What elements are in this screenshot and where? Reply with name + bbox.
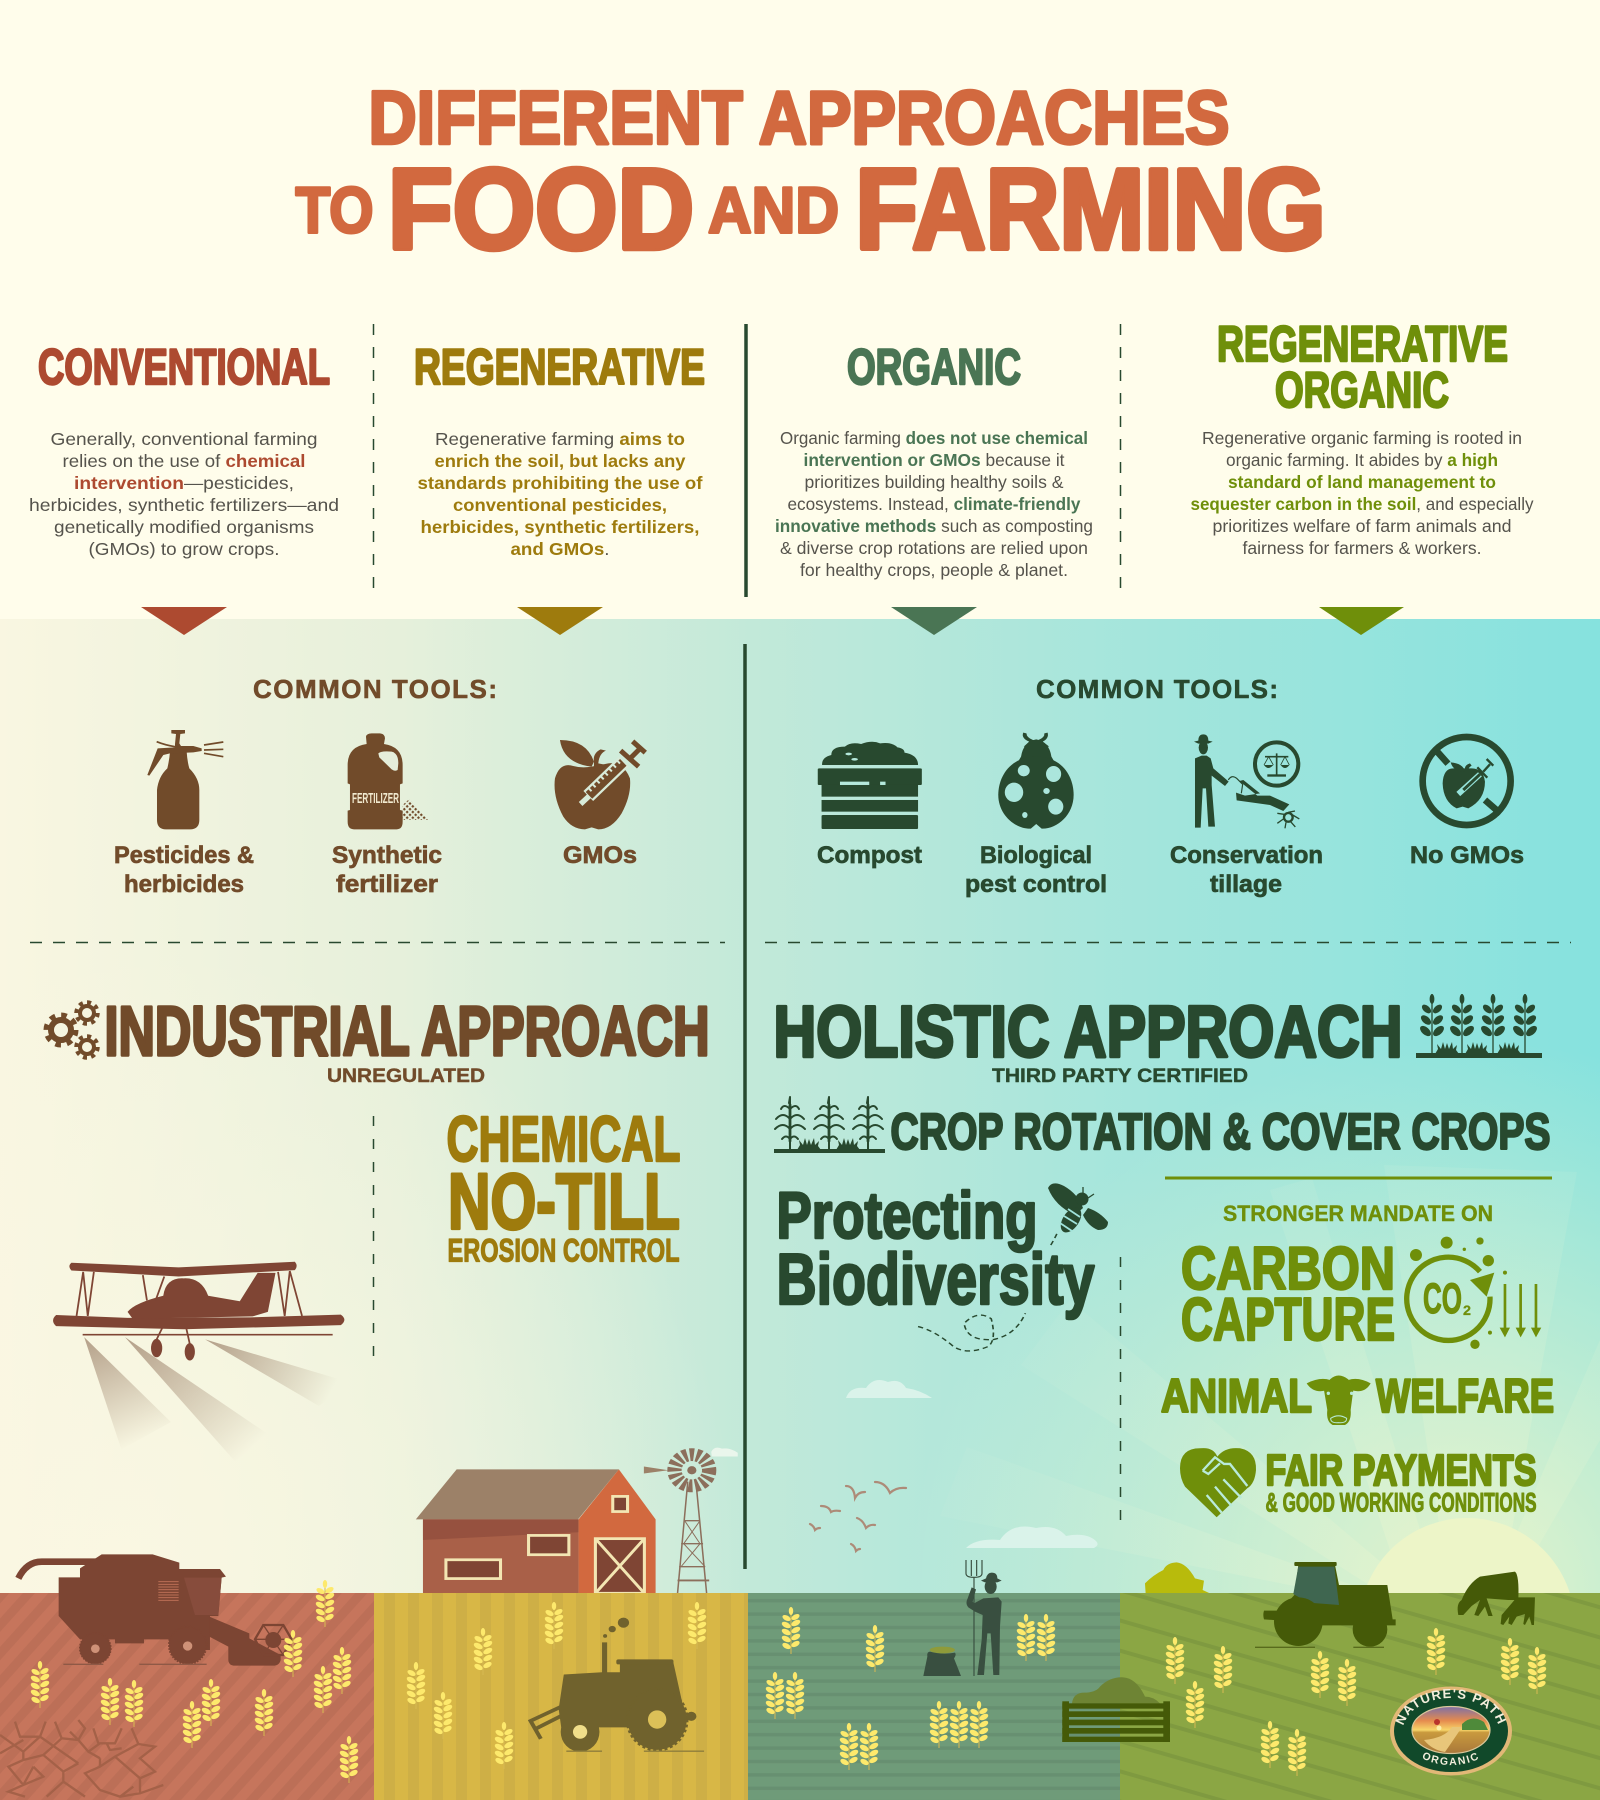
horizontal dashes (30, 942, 1571, 944)
ground: conventional field (0, 1593, 374, 1800)
text: conventional description: relies on the use of chemical (62, 451, 306, 471)
text: protecting biodiversity: Biodiversity (776, 1240, 1094, 1320)
icon: GMO apple with syringe (555, 740, 645, 829)
text: regenerative description: standards prohibiting the use of (418, 473, 703, 493)
icon: crop row plants (774, 1097, 885, 1153)
icon: compost sack (923, 1647, 961, 1676)
icon: compost crate (1062, 1677, 1170, 1742)
text: carbon capture: CAPTURE (1181, 1286, 1395, 1353)
icon: growing plants (1416, 994, 1542, 1058)
text: conventional description: intervention —pesticides, (74, 473, 294, 493)
text: regenerative organic description: standard of land management to (1228, 472, 1496, 492)
labels: organic tools: Compost (817, 842, 922, 869)
text: regenerative description: Regenerative farming aims to (435, 429, 685, 449)
text: chemical no-till erosion control: CHEMICAL (446, 1103, 680, 1175)
labels: conventional tools: herbicides (124, 871, 244, 898)
labels: conventional tools: GMOs (563, 842, 637, 869)
icon: cow head (1307, 1375, 1371, 1425)
text: organic description: Organic farming does not use chemical (780, 428, 1088, 448)
labels: organic tools: pest control (965, 871, 1107, 898)
labels: organic tools: Biological (980, 842, 1092, 869)
heading: industrial approach (104, 992, 710, 1087)
marker: regenerative triangle (517, 607, 603, 635)
divider: industrial (372, 1116, 374, 1356)
heading: industrial approach: INDUSTRIAL APPROACH (104, 992, 710, 1070)
ground: regenerative field (374, 1593, 748, 1800)
icon: hay bale (1145, 1562, 1210, 1593)
text: organic description: innovative methods such as composting (775, 516, 1093, 536)
title: AND (708, 174, 839, 246)
text: animal welfare (1161, 1369, 1554, 1422)
divider: green line (1165, 1176, 1552, 1180)
heading: common tools left: COMMON TOOLS: (253, 674, 497, 704)
title: DIFFERENT APPROACHES (368, 76, 1230, 160)
heading: regenerative organic: REGENERATIVE (1217, 316, 1508, 372)
text: regenerative organic description: fairness for farmers & workers. (1242, 538, 1482, 558)
panel: organic (775, 339, 1093, 635)
logo: Nature's Path Organic: ORGANIC (1423, 1752, 1478, 1766)
title: TO (296, 174, 374, 246)
title: FOOD (388, 146, 694, 274)
wheat: regenerative organic field (1165, 1628, 1547, 1776)
icon: spray bottle (147, 730, 223, 829)
icon: cracked soil (0, 1720, 163, 1797)
icon: scales of justice (1255, 742, 1298, 786)
heading: regenerative: REGENERATIVE (414, 339, 705, 395)
text: fair payments (1266, 1446, 1536, 1518)
icon: compost bin (818, 742, 922, 829)
heading: stronger mandate: STRONGER MANDATE ON (1223, 1201, 1493, 1226)
heading: industrial approach: UNREGULATED (327, 1066, 485, 1087)
heading: organic: ORGANIC (847, 339, 1021, 395)
title: FARMING (856, 146, 1326, 274)
center divider (743, 644, 747, 1569)
sun (1359, 1518, 1575, 1734)
text: regenerative organic description: Regenerative organic farming is rooted in (1202, 428, 1522, 448)
wheat: conventional field (30, 1580, 359, 1783)
text: regenerative description: conventional pesticides, (453, 495, 667, 515)
text: regenerative description: herbicides, synthetic fertilizers, (420, 517, 700, 537)
text: regenerative organic description (1190, 428, 1534, 558)
panel: conventional (29, 339, 339, 635)
text: conventional description: Generally, conventional farming (50, 429, 318, 449)
text: organic description: prioritizes building healthy soils & (804, 472, 1064, 492)
text: organic description: for healthy crops, people & planet. (800, 560, 1068, 580)
logo: Nature's Path Organic (1390, 1686, 1512, 1776)
text: regenerative description: and GMOs . (510, 539, 610, 559)
heading: regenerative organic: ORGANIC (1275, 362, 1449, 418)
text: chemical no-till erosion control: NO-TILL (448, 1156, 680, 1246)
text: organic description (775, 428, 1093, 580)
icon: birds (810, 1482, 906, 1551)
wheat: organic field (765, 1607, 1056, 1770)
heading: regenerative organic (1217, 316, 1508, 418)
icon: crop duster plane (53, 1262, 352, 1461)
sky gradient panel (0, 619, 1600, 1599)
icon: farmer with pitchfork (966, 1560, 1002, 1676)
icon: fertilizer jug: FERTILIZER (352, 790, 399, 807)
text: protecting biodiversity (776, 1178, 1094, 1320)
text: conventional description: genetically modified organisms (54, 517, 314, 537)
text: conventional description: herbicides, synthetic fertilizers—and (29, 495, 339, 515)
heading: common tools right: COMMON TOOLS: (1036, 674, 1278, 704)
text: animal welfare: ANIMAL (1161, 1369, 1312, 1422)
text: regenerative description (418, 429, 703, 559)
labels: conventional tools: Synthetic (332, 842, 442, 869)
labels: organic tools: Conservation (1170, 842, 1323, 869)
icon: CO2 cycle: 2 (1463, 1302, 1471, 1318)
logo: Nature's Path Organic: NATURE'S PATH (1395, 1689, 1506, 1725)
text: regenerative organic description: sequester carbon in the soil, and especially (1190, 494, 1534, 514)
icon: windmill (644, 1448, 738, 1593)
text: animal welfare: WELFARE (1376, 1369, 1554, 1422)
heading: holistic approach: THIRD PARTY CERTIFIED (992, 1066, 1248, 1087)
icon: barn (416, 1469, 656, 1593)
panel: regenerative organic (1190, 316, 1534, 635)
heading: conventional: CONVENTIONAL (38, 339, 330, 395)
icon: CO2 cycle (1407, 1237, 1541, 1349)
icon: grazing cows (1458, 1572, 1535, 1625)
text: organic description: ecosystems. Instead, climate-friendly (788, 494, 1081, 514)
icon: olive tractor (1255, 1562, 1396, 1647)
column dividers (374, 324, 1120, 597)
labels: organic tools: tillage (1210, 871, 1282, 898)
text: regenerative organic description: organic farming. It abides by a high (1226, 450, 1498, 470)
ground: organic field (748, 1593, 1120, 1800)
text: organic description: intervention or GMOs because it (804, 450, 1065, 470)
icon: regenerative tractor (531, 1618, 704, 1752)
labels: conventional tools: fertilizer (336, 871, 438, 898)
icon: clouds (846, 1380, 1098, 1548)
marker: organic triangle (891, 607, 977, 635)
labels: conventional tools (114, 842, 637, 898)
text: regenerative organic description: prioritizes welfare of farm animals and (1212, 516, 1512, 536)
panel: regenerative (414, 339, 705, 635)
labels: conventional tools: Pesticides & (114, 842, 254, 869)
ground: regenerative organic field (1120, 1593, 1600, 1800)
text: conventional description (29, 429, 339, 559)
icon: combine harvester (18, 1554, 292, 1666)
text: organic description: & diverse crop rotations are relied upon (780, 538, 1088, 558)
icon: heart handshake (1180, 1448, 1256, 1517)
marker: conventional triangle (141, 607, 227, 635)
wheat: regenerative field (406, 1602, 707, 1769)
icon: CO2 cycle: CO (1423, 1275, 1462, 1323)
icon: ladybug (998, 733, 1074, 829)
icon: gears (46, 1002, 98, 1058)
marker: regenerative organic triangle (1319, 607, 1404, 635)
text: chemical no-till erosion control (446, 1103, 680, 1268)
text: protecting biodiversity: Protecting (776, 1178, 1038, 1252)
labels: organic tools: No GMOs (1410, 842, 1524, 869)
icon: fertilizer jug (348, 733, 429, 829)
divider: dashed holistic (1120, 1257, 1122, 1520)
text: carbon capture: CARBON (1181, 1235, 1395, 1302)
icon: bee and flight path (918, 1183, 1108, 1351)
labels: organic tools (817, 842, 1524, 898)
icon: no GMOs (1423, 737, 1511, 825)
text: regenerative description: enrich the soil, but lacks any (434, 451, 686, 471)
text: chemical no-till erosion control: EROSION CONTROL (448, 1232, 680, 1268)
text: conventional description: (GMOs) to grow crops. (88, 539, 280, 559)
text: carbon capture (1181, 1235, 1395, 1353)
heading: holistic approach: HOLISTIC APPROACH (774, 992, 1402, 1072)
title (296, 76, 1326, 274)
icon: farmer with tillage tool (1194, 734, 1299, 828)
